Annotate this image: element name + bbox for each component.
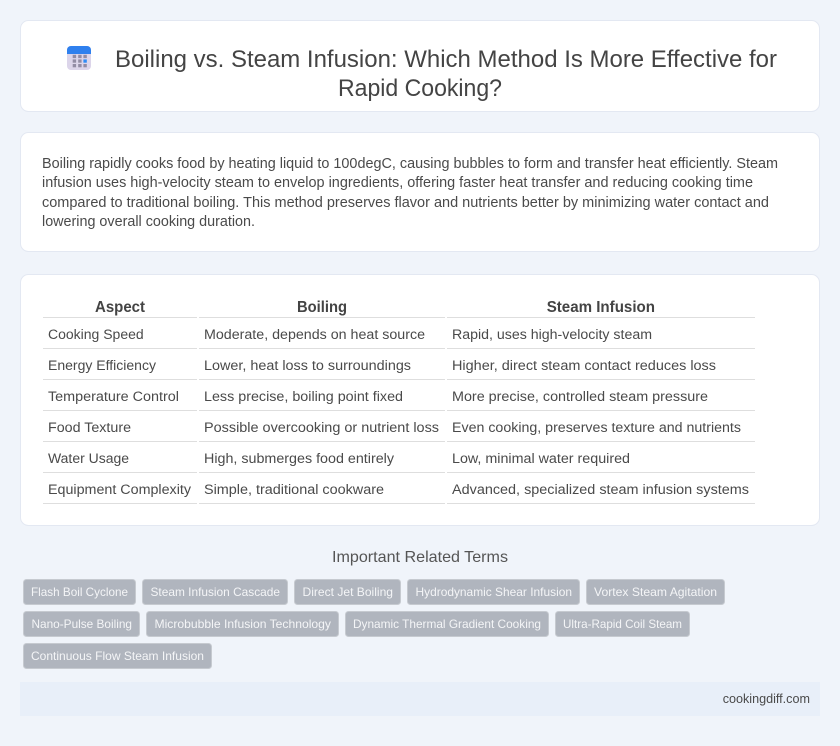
tag: vortex steam agitation: Vortex Steam Agitation: [594, 585, 717, 599]
row: cooking speed: Cooking Speed: [48, 327, 144, 343]
row: water usage: Low, minimal water required: [452, 451, 630, 467]
tag: vortex steam agitation: [586, 580, 724, 604]
tag: hydrodynamic shear infusion: [408, 580, 580, 604]
tag: steam infusion cascade: [142, 580, 288, 604]
tag: dynamic thermal gradient cooking: Dynamic Thermal Gradient Cooking: [353, 617, 541, 631]
row: energy efficiency: [43, 358, 755, 380]
footer bar: cookingdiff.com: [723, 691, 810, 706]
summary text: Boiling rapidly cooks food by heating liquid to 100degC, causing bubbles to form and transfer heat efficiently. Steam: [42, 156, 778, 172]
tag: continuous flow steam infusion: Continuous Flow Steam Infusion: [31, 649, 204, 663]
tag: flash boil cyclone: [24, 580, 136, 604]
row: temperature control: Less precise, boiling point fixed: [204, 389, 403, 405]
row: energy efficiency: Lower, heat loss to surroundings: [204, 358, 411, 374]
tag: ultra-rapid coil steam: [556, 612, 690, 636]
summary text: lowering overall cooking duration.: [42, 214, 255, 230]
table header row: Steam Infusion: [547, 299, 655, 316]
row: food texture: Possible overcooking or nutrient loss: [204, 420, 439, 436]
table header row: Boiling: [297, 299, 347, 316]
row: cooking speed: [43, 327, 755, 349]
row: cooking speed: Rapid, uses high-velocity steam: [452, 327, 652, 343]
row: food texture: Even cooking, preserves texture and nutrients: [452, 420, 741, 436]
heading: important related terms: Important Related Terms: [332, 549, 508, 566]
tag: dynamic thermal gradient cooking: [346, 612, 548, 636]
row: energy efficiency: Energy Efficiency: [48, 358, 157, 374]
row: temperature control: [43, 389, 755, 411]
table header row: [43, 299, 755, 318]
row: water usage: High, submerges food entirely: [204, 451, 395, 467]
row: water usage: [43, 451, 755, 473]
row: food texture: Food Texture: [48, 420, 131, 436]
related term tags: [24, 580, 724, 668]
title: Rapid Cooking?: [338, 75, 502, 102]
panel: summary paragraph: [20, 132, 820, 252]
footer bar: [20, 682, 820, 716]
row: equipment complexity: Advanced, specialized steam infusion systems: [452, 482, 749, 498]
title: [115, 46, 777, 102]
row: food texture: [43, 420, 755, 442]
row: temperature control: Temperature Control: [48, 389, 179, 405]
row: temperature control: More precise, controlled steam pressure: [452, 389, 708, 405]
row: cooking speed: Moderate, depends on heat source: [204, 327, 425, 343]
row: equipment complexity: Equipment Complexity: [48, 482, 192, 498]
summary text: [42, 156, 778, 230]
tag: nano-pulse boiling: [24, 612, 140, 636]
row: equipment complexity: [43, 482, 755, 504]
tag: direct jet boiling: Direct Jet Boiling: [302, 585, 393, 599]
title: Boiling vs. Steam Infusion: Which Method Is More Effective for: [115, 46, 777, 73]
icon: calendar grid: [67, 46, 91, 70]
tag: nano-pulse boiling: Nano-Pulse Boiling: [32, 617, 132, 631]
tag: continuous flow steam infusion: [24, 644, 212, 668]
summary text: infusion uses high-velocity steam to envelop ingredients, offering faster heat transfer and reducing cooking time: [42, 175, 753, 191]
table header row: Aspect: [95, 299, 146, 316]
row: energy efficiency: Higher, direct steam contact reduces loss: [452, 358, 716, 374]
row: equipment complexity: Simple, traditional cookware: [204, 482, 384, 498]
tag: direct jet boiling: [294, 580, 400, 604]
tag: microbubble infusion technology: Microbubble Infusion Technology: [154, 617, 331, 631]
row: water usage: Water Usage: [48, 451, 129, 467]
tag: microbubble infusion technology: [146, 612, 338, 636]
tag: ultra-rapid coil steam: Ultra-Rapid Coil Steam: [563, 617, 682, 631]
panel: header: [20, 20, 820, 112]
tag: flash boil cyclone: Flash Boil Cyclone: [31, 585, 128, 599]
tag: hydrodynamic shear infusion: Hydrodynamic Shear Infusion: [416, 585, 572, 599]
panel: comparison table: [20, 274, 820, 526]
tag: steam infusion cascade: Steam Infusion Cascade: [150, 585, 280, 599]
summary text: compared to traditional boiling. This method preserves flavor and nutrients better by minimizing water contact and: [42, 195, 769, 211]
